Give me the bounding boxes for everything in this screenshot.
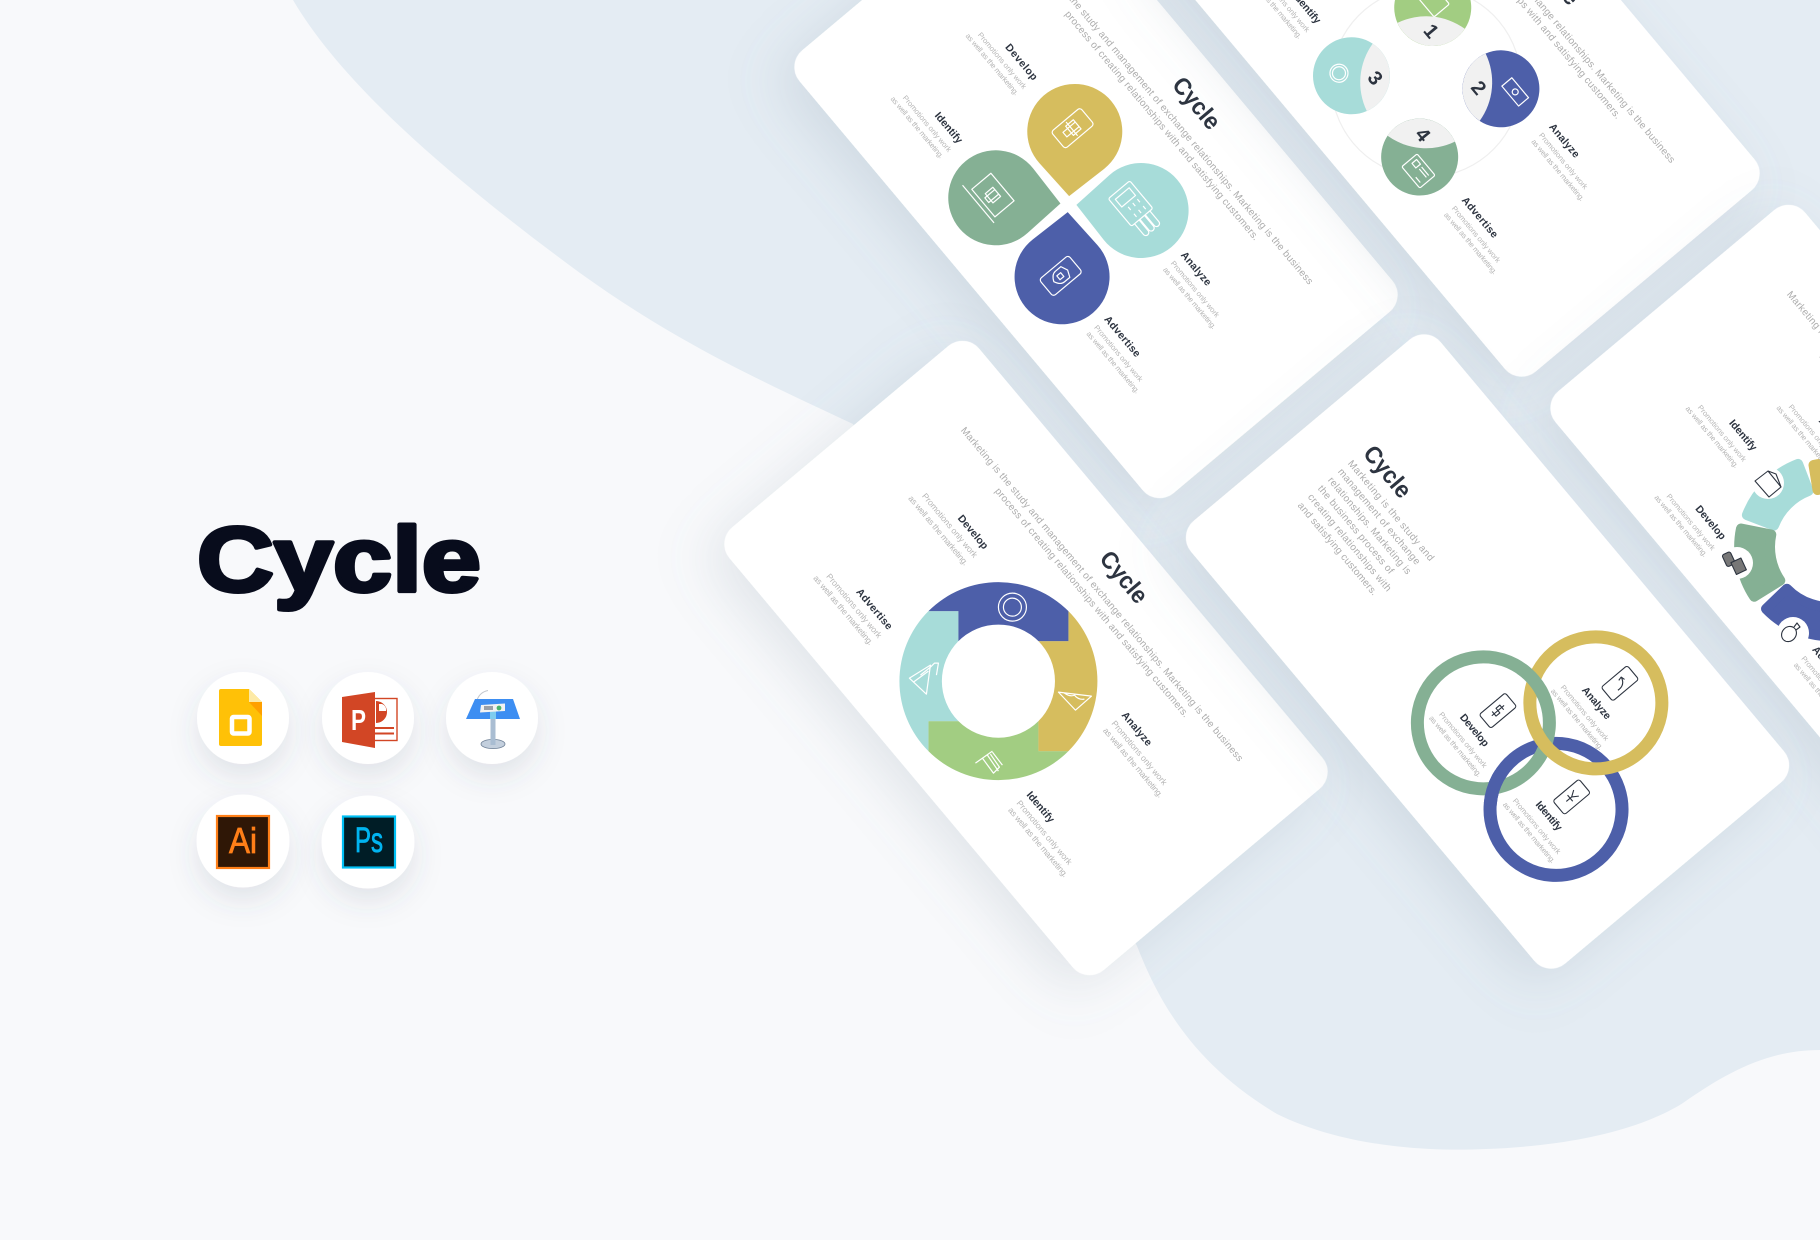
icon: powerpoint: P bbox=[351, 705, 366, 737]
text block: process of creating relationships with and satisfying customers. bbox=[1062, 9, 1261, 243]
petal chart bbox=[938, 74, 1199, 335]
label: identify: Promotions only work bbox=[1696, 403, 1748, 464]
label: identify: as well as the marketing. bbox=[1006, 805, 1070, 879]
panel: slide segments bbox=[1527, 196, 1820, 860]
label: analyze: Analyze bbox=[1178, 249, 1214, 289]
label: develop bbox=[964, 16, 1040, 97]
icon: card reader bbox=[1108, 181, 1164, 239]
icon: coin in circle 3 bbox=[1326, 61, 1352, 86]
heading: Cycle bbox=[1166, 72, 1226, 135]
label: identify: Promotions only work bbox=[1511, 796, 1563, 856]
label: advertise: Advertise bbox=[853, 586, 895, 632]
label: identify bbox=[1006, 789, 1090, 879]
text block: creating relationships with bbox=[1305, 492, 1393, 594]
icon: keynote bbox=[446, 672, 538, 764]
title: Cycle bbox=[197, 509, 481, 611]
label: advertise: as well as the marketing. bbox=[1085, 330, 1142, 395]
icon: card in circle 1 bbox=[1416, 0, 1449, 17]
panel: slide donut bbox=[706, 332, 1337, 992]
icon: banknote in circle 2 bbox=[1502, 78, 1529, 106]
label: advertise bbox=[1792, 644, 1820, 726]
label: develop: Develop bbox=[1457, 712, 1491, 749]
text block: relationships. Marketing is bbox=[1325, 475, 1413, 577]
icon: google slides bbox=[197, 672, 289, 764]
label: develop bbox=[906, 477, 991, 568]
background blob bbox=[293, 0, 1820, 1150]
label: identify bbox=[1247, 0, 1323, 41]
label: develop: Promotions only work bbox=[1437, 710, 1489, 770]
text block: and satisfying customers. bbox=[1295, 501, 1379, 598]
heading: Cycle bbox=[1094, 546, 1153, 609]
label: develop bbox=[1427, 697, 1504, 779]
text block: process of creating relationships with and satisfying customers. bbox=[992, 486, 1191, 720]
label: identify: Identify bbox=[1533, 799, 1565, 834]
icon: illustrator: Ai bbox=[229, 820, 257, 861]
label: advertise: as well as the marketing. bbox=[1442, 211, 1499, 276]
icon: illustrator bbox=[196, 794, 290, 888]
panel: slide numbered circles bbox=[1119, 0, 1769, 409]
icon: atm screen bbox=[963, 166, 1017, 223]
label: analyze: Promotions only work bbox=[1110, 719, 1170, 788]
label: analyze: Promotions only work bbox=[1537, 131, 1590, 191]
segmented ring chart bbox=[1721, 463, 1820, 649]
label: develop: Promotions only work bbox=[920, 491, 980, 560]
label: identify: Promotions only work bbox=[901, 94, 954, 154]
label: identify: as well as the marketing. bbox=[1501, 800, 1557, 865]
numbered circle diagram: 1 bbox=[1419, 20, 1443, 43]
label: advertise bbox=[1085, 314, 1161, 395]
label: analyze: Analyze bbox=[1546, 121, 1582, 161]
label: develop: as well as the marketing. bbox=[1652, 493, 1709, 559]
label: analyze: as well as the marketing. bbox=[1549, 687, 1605, 752]
label: advertise: Promotions only work bbox=[1450, 204, 1502, 265]
label: advertise: Promotions only work bbox=[824, 571, 885, 641]
label: identify bbox=[889, 79, 965, 160]
label: analyze: as well as the marketing. bbox=[1529, 137, 1587, 203]
label: develop: Develop bbox=[955, 513, 991, 552]
label: identify bbox=[1684, 388, 1761, 470]
label: identify: Promotions only work bbox=[1015, 798, 1075, 867]
label: analyze: Promotions only work bbox=[1169, 259, 1222, 319]
numbered circle diagram: 3 bbox=[1363, 67, 1387, 90]
text block bbox=[1295, 458, 1436, 606]
label: analyze bbox=[1549, 670, 1626, 752]
icon: photoshop bbox=[322, 796, 414, 888]
icon: powerpoint bbox=[322, 672, 414, 764]
label: advertise: Advertise bbox=[1459, 195, 1500, 241]
label: analyze: as well as the marketing. bbox=[1101, 726, 1165, 799]
label: develop: Promotions only work bbox=[976, 31, 1029, 91]
numbered circle diagram bbox=[1200, 0, 1652, 308]
label: advertise bbox=[1442, 195, 1518, 276]
label: identify: as well as the marketing. bbox=[1684, 404, 1741, 470]
icon: photoshop: Ps bbox=[355, 821, 383, 860]
label: identify: Identify bbox=[932, 110, 965, 146]
text block: Marketing is the study and bbox=[1345, 458, 1436, 564]
text block: management of exchange bbox=[1335, 467, 1422, 568]
text block: Marketing is the study and management of exchange relationships. Marketing is the business bbox=[958, 425, 1245, 764]
donut chart bbox=[899, 582, 1097, 780]
icon: phone develop bbox=[1479, 693, 1517, 728]
icon: phone analyze bbox=[1601, 665, 1639, 701]
panel: slide rings bbox=[1177, 325, 1798, 978]
label: identify bbox=[1501, 783, 1578, 865]
label: identify: Identify bbox=[1024, 789, 1057, 825]
label: develop: Develop bbox=[1002, 42, 1040, 83]
label: analyze: Promotions only work bbox=[1559, 683, 1611, 743]
icon: credit card in circle 4 bbox=[1402, 154, 1435, 188]
label: analyze bbox=[1161, 249, 1237, 331]
label: develop: as well as the marketing. bbox=[906, 493, 971, 567]
numbered circle diagram: 4 bbox=[1410, 124, 1435, 147]
heading: Cycle bbox=[1358, 440, 1417, 504]
label: identify: Identify bbox=[1726, 417, 1759, 454]
text block: the business process of bbox=[1315, 484, 1396, 577]
label: develop: as well as the marketing. bbox=[964, 32, 1021, 97]
label: identify: as well as the marketing. bbox=[889, 95, 946, 160]
numbered circle diagram: 2 bbox=[1466, 77, 1490, 100]
text block bbox=[1774, 289, 1820, 636]
icon: shield phone bbox=[1039, 255, 1082, 297]
label: develop: as well as the marketing. bbox=[1427, 714, 1484, 779]
label: develop: Develop bbox=[1693, 503, 1728, 542]
label: analyze bbox=[1101, 710, 1185, 799]
label: analyze: Analyze bbox=[1579, 684, 1613, 722]
label: advertise: Advertise bbox=[1101, 314, 1143, 360]
label: advertise: as well as the marketing. bbox=[811, 573, 876, 647]
label: develop bbox=[1652, 476, 1730, 559]
icon: card phone bbox=[1051, 108, 1094, 149]
text block bbox=[1380, 0, 1677, 174]
label: advertise bbox=[811, 557, 895, 648]
label: analyze: Analyze bbox=[1119, 710, 1154, 749]
label: advertise: Promotions only work bbox=[1092, 323, 1145, 384]
label: analyze bbox=[1529, 121, 1606, 203]
label: develop: Promotions only work bbox=[1665, 492, 1717, 552]
interlocking rings bbox=[1410, 630, 1668, 882]
label: analyze: as well as the marketing. bbox=[1161, 265, 1218, 331]
icon: phone identify bbox=[1553, 779, 1590, 815]
panel: slide petals bbox=[752, 0, 1407, 535]
